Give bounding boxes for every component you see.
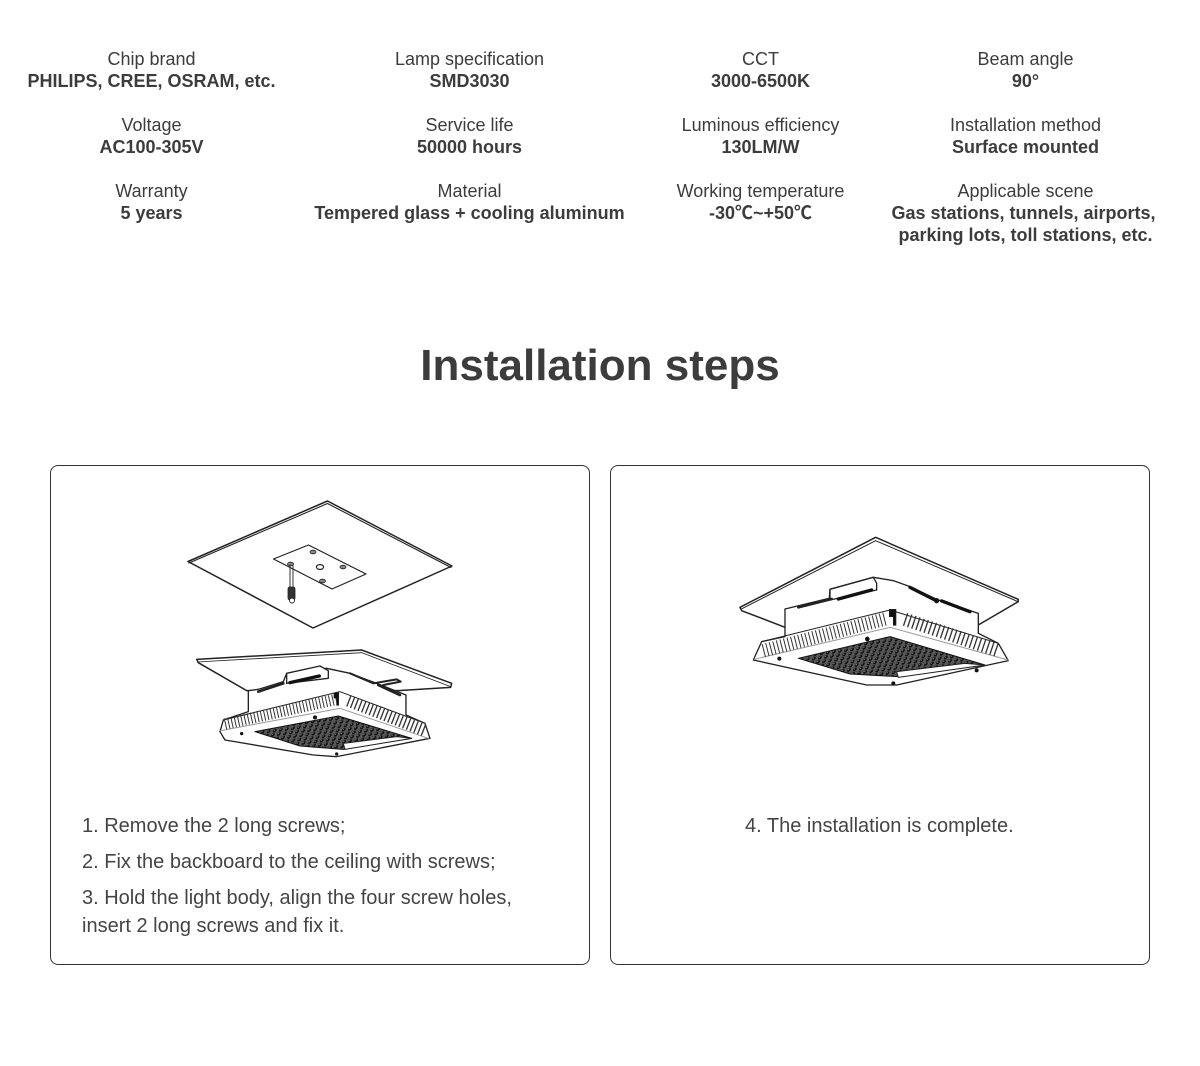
spec: voltage [99, 115, 204, 157]
spec: luminous efficiency [682, 115, 840, 157]
spec: lamp specification: SMD3030 [429, 71, 510, 91]
spec: working temperature: Working temperature [677, 181, 844, 201]
spec: service life: Service life [425, 115, 514, 135]
spec: luminous efficiency: 130LM/W [721, 137, 800, 157]
spec: lamp specification: Lamp specification [395, 49, 544, 69]
spec: service life: 50000 hours [417, 137, 522, 157]
spec: chip brand: PHILIPS, CREE, OSRAM, etc. [27, 71, 276, 91]
icon: light body below backboard [197, 650, 452, 757]
spec: warranty: 5 years [120, 203, 183, 223]
spec: chip brand [27, 49, 276, 91]
spec: applicable scene: Applicable scene [957, 181, 1094, 201]
spec: warranty: Warranty [115, 181, 188, 201]
icon: installed light [740, 537, 1018, 685]
spec: beam angle: Beam angle [977, 49, 1074, 69]
step 2 text: 2. Fix the backboard to the ceiling with screws; [82, 851, 496, 873]
spec: beam angle: 90° [1012, 71, 1039, 91]
spec: CCT: 3000-6500K [711, 71, 810, 91]
spec: working temperature: -30℃~+50℃ [709, 203, 812, 223]
spec: lamp specification [395, 49, 544, 91]
spec: applicable scene: Gas stations, tunnels, airports, [891, 203, 1156, 223]
spec: installation method: Installation method [950, 115, 1101, 135]
spec: luminous efficiency: Luminous efficiency [682, 115, 839, 135]
spec: warranty [115, 181, 188, 223]
step 4 text: 4. The installation is complete. [745, 815, 1014, 837]
icon: backboard with screw [188, 501, 452, 628]
step 1 text: 1. Remove the 2 long screws; [82, 815, 345, 837]
spec: service life [417, 115, 522, 157]
title: Installation steps [420, 341, 780, 390]
step 3 text: 3. Hold the light body, align the four screw holes, [82, 887, 512, 909]
spec: material [314, 181, 625, 223]
spec: material: Tempered glass + cooling aluminum [314, 203, 625, 223]
spec: applicable scene: parking lots, toll stations, etc. [898, 225, 1153, 245]
spec: working temperature [676, 181, 844, 223]
spec: installation method: Surface mounted [952, 137, 1099, 157]
step 3 text [82, 887, 512, 937]
panel: step 4 [610, 465, 1150, 965]
spec: applicable scene [891, 181, 1156, 245]
spec: chip brand: Chip brand [107, 49, 196, 69]
spec: CCT: CCT [742, 49, 779, 69]
spec: beam angle [977, 49, 1074, 91]
spec: material: Material [437, 181, 502, 201]
spec: voltage: AC100-305V [99, 137, 204, 157]
spec: installation method [950, 115, 1101, 157]
panel: steps 1 to 3 [50, 465, 590, 965]
spec: voltage: Voltage [121, 115, 182, 135]
step 3 text: insert 2 long screws and fix it. [82, 915, 344, 937]
spec: CCT [711, 49, 810, 91]
